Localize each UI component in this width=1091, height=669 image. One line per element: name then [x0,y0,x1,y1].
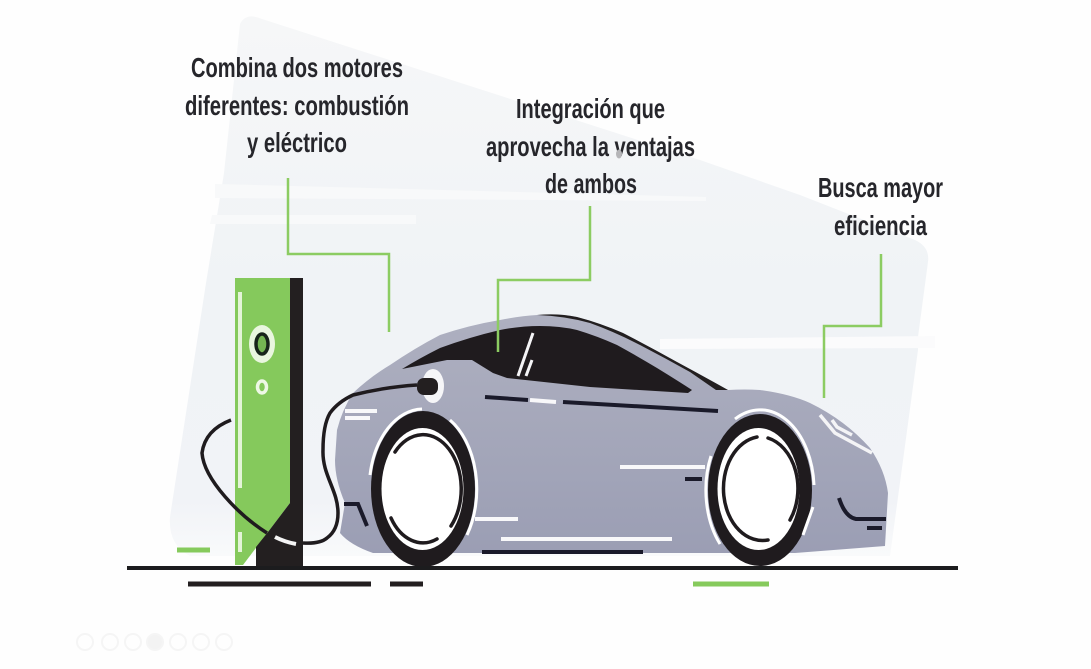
mouse cursor [616,150,622,158]
heading: eficiencia: Busca mayor [818,172,943,203]
rear wheel [370,409,477,567]
faint player controls [77,634,232,650]
charging cable [202,369,444,543]
heading: integración: de ambos [545,168,637,199]
heading: combina dos motores: Combina dos motores [191,52,403,83]
heading: combina dos motores: diferentes: combustión [185,90,409,121]
heading: integración: aprovecha la ventajas [486,131,695,162]
heading: combina dos motores [185,52,409,158]
callout line 2 [498,206,590,352]
charging station [235,278,303,568]
heading: integración: Integración que [516,93,665,124]
front wheel [706,410,814,566]
heading: eficiencia: eficiencia [834,210,927,241]
background blob [170,16,935,556]
ground line [127,566,958,570]
callout line 1 [288,178,389,332]
car body [335,314,888,553]
heading: combina dos motores: y eléctrico [247,127,347,158]
heading: eficiencia [818,172,943,241]
callout line 3 [824,254,881,398]
ground accents [177,550,769,584]
heading: integración [486,93,695,199]
